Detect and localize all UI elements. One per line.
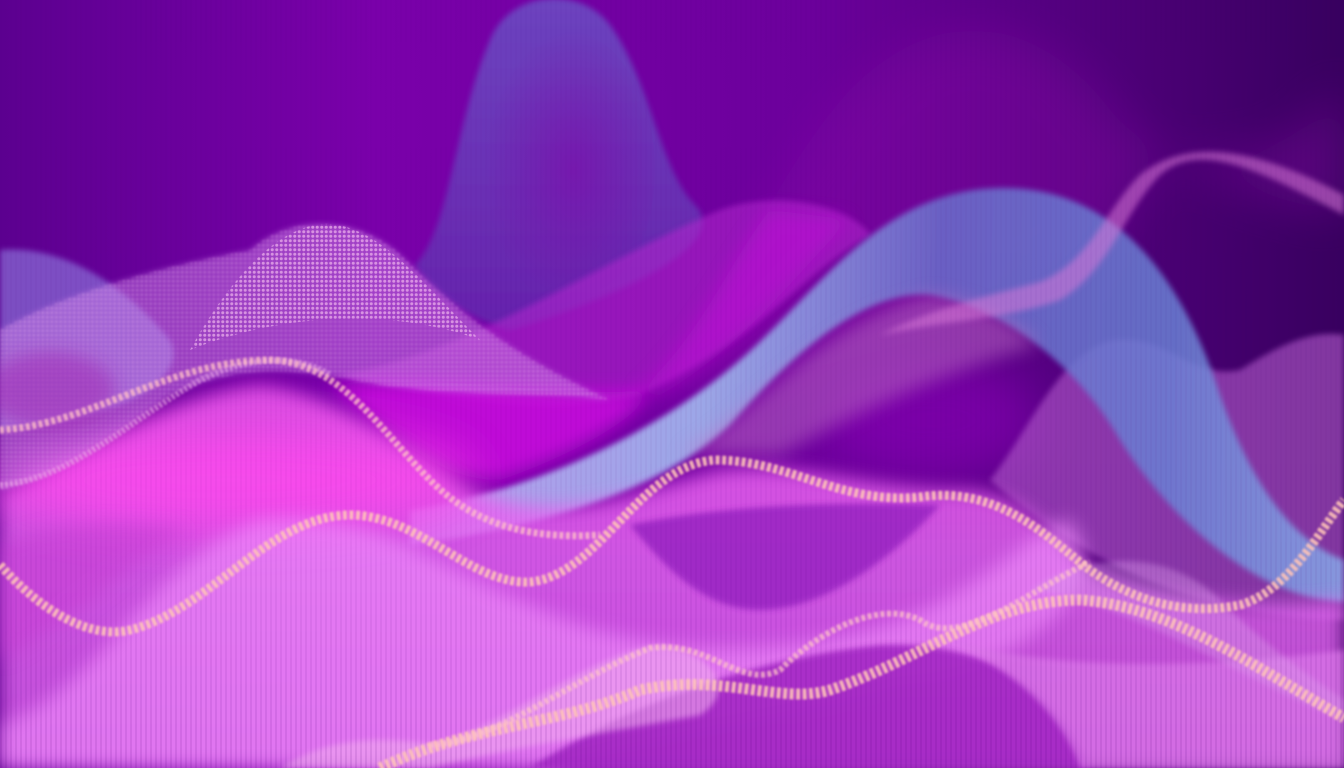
mesh lower rim xyxy=(0,361,330,485)
pink ribbon under blue xyxy=(680,295,1040,455)
lower right pink hump xyxy=(1030,561,1344,720)
hot pink glow left xyxy=(0,430,470,530)
pink thin ribbon to upper right xyxy=(880,152,1344,335)
dotted wave: lower long xyxy=(380,600,1344,768)
mesh swirl xyxy=(0,352,115,428)
mesh dots xyxy=(0,224,610,490)
pink lower mass xyxy=(0,385,1344,768)
light lilac veil xyxy=(0,519,1085,768)
dotted wave: lower secondary xyxy=(430,562,1090,745)
mid purple glow xyxy=(820,360,1040,480)
faint upper-right magenta wave xyxy=(640,31,1344,400)
dotted mesh wave xyxy=(0,224,610,490)
purple hollow in lower centre xyxy=(630,504,940,610)
bright magenta core xyxy=(330,381,650,480)
magenta vertical streak xyxy=(635,210,850,395)
hump inner shade xyxy=(475,30,655,310)
left blue hump xyxy=(0,250,173,430)
bottom peach ribbon xyxy=(280,645,719,768)
blue ribbon large xyxy=(410,188,1344,602)
left darker wave xyxy=(0,524,190,660)
mesh lilac underlay xyxy=(0,224,610,490)
lower right lilac band xyxy=(950,640,1344,768)
dotted wave: middle xyxy=(0,460,1344,632)
dotted wave: top left xyxy=(0,360,600,536)
dark lower band xyxy=(530,645,1090,768)
mesh highlight xyxy=(190,224,480,350)
magenta ribbon centre xyxy=(340,200,870,406)
blue top hump xyxy=(415,0,703,330)
right lilac wave xyxy=(990,334,1344,620)
vertical line texture xyxy=(0,580,1342,768)
